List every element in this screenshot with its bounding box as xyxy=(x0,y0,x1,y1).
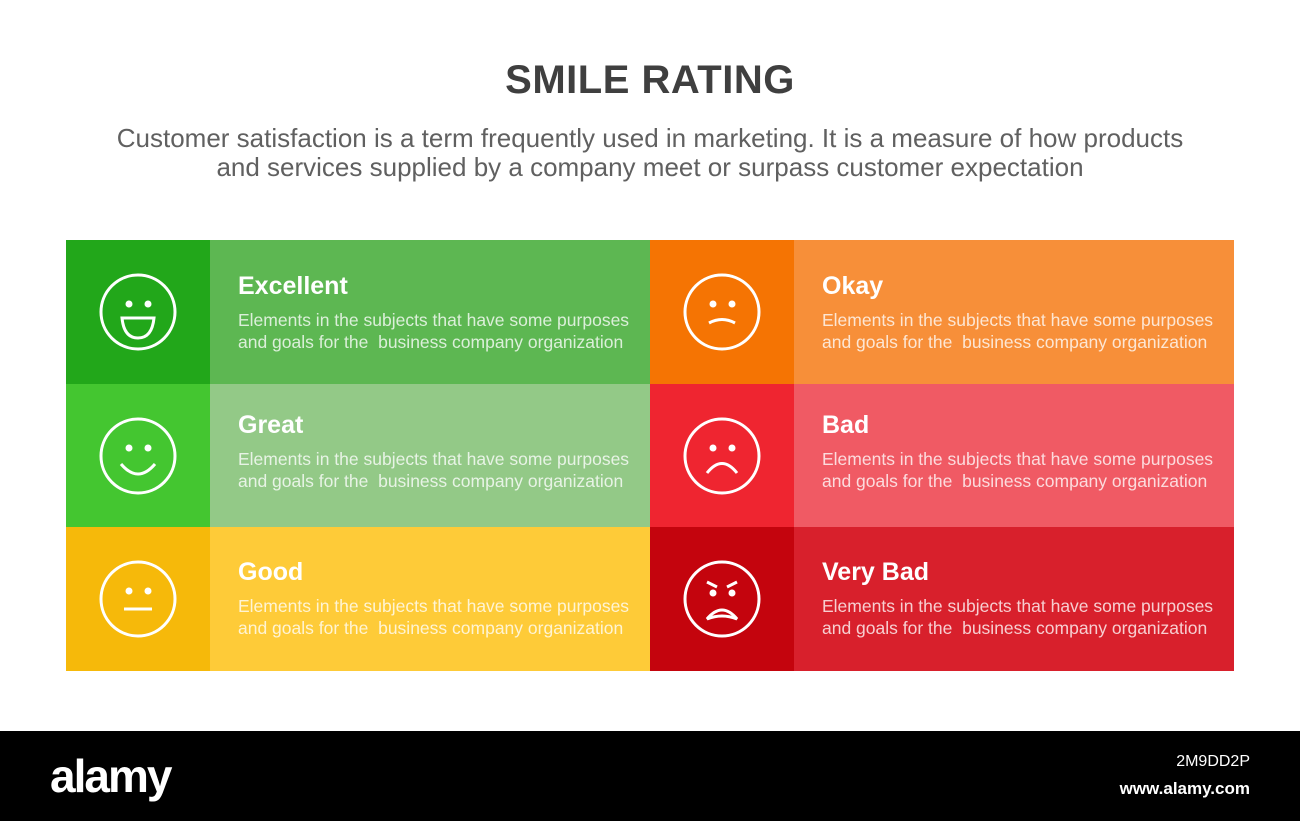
icon: slight frown xyxy=(650,240,794,384)
text: great: Great xyxy=(238,411,303,439)
text: very bad: and goals for the business company organization xyxy=(822,618,1207,638)
text: excellent: Excellent xyxy=(238,272,348,300)
text: bad xyxy=(794,384,1234,527)
footer logo: alamy xyxy=(50,750,170,802)
text: excellent: and goals for the business company organization xyxy=(238,332,623,352)
subtitle: Customer satisfaction is a term frequently used in marketing. It is a measure of how products xyxy=(117,123,1183,153)
text: good: Good xyxy=(238,558,303,586)
icon: angry face xyxy=(650,527,794,671)
panel: bad xyxy=(650,384,1234,527)
icon: neutral face xyxy=(66,527,210,671)
panel: excellent xyxy=(66,240,650,384)
icon: laughing face xyxy=(66,240,210,384)
footer url: www.alamy.com xyxy=(1120,779,1250,798)
subtitle xyxy=(117,123,1183,182)
title: SMILE RATING xyxy=(505,58,795,102)
text: great: and goals for the business company organization xyxy=(238,471,623,491)
text: very bad: Elements in the subjects that have some purposes xyxy=(822,596,1213,616)
panel: good xyxy=(66,527,650,671)
panel: very bad xyxy=(650,527,1234,671)
text: great xyxy=(210,384,650,527)
text: very bad xyxy=(794,527,1234,671)
text: bad: Bad xyxy=(822,411,869,439)
icon: smile xyxy=(66,384,210,527)
text: great: Elements in the subjects that have some purposes xyxy=(238,449,629,469)
text: okay: and goals for the business company organization xyxy=(822,332,1207,352)
text: good: and goals for the business company organization xyxy=(238,618,623,638)
text: okay: Okay xyxy=(822,272,883,300)
panel: great xyxy=(66,384,650,527)
text: bad: Elements in the subjects that have some purposes xyxy=(822,449,1213,469)
text: bad: and goals for the business company organization xyxy=(822,471,1207,491)
text: excellent: Elements in the subjects that have some purposes xyxy=(238,310,629,330)
text: good: Elements in the subjects that have some purposes xyxy=(238,596,629,616)
footer bar xyxy=(0,731,1300,821)
panel: okay xyxy=(650,240,1234,384)
icon: sad face xyxy=(650,384,794,527)
subtitle: and services supplied by a company meet or surpass customer expectation xyxy=(216,152,1084,182)
text: excellent xyxy=(210,240,650,384)
footer id: 2M9DD2P xyxy=(1176,753,1250,770)
text: very bad: Very Bad xyxy=(822,558,929,586)
text: okay: Elements in the subjects that have some purposes xyxy=(822,310,1213,330)
text: good xyxy=(210,527,650,671)
text: okay xyxy=(794,240,1234,384)
